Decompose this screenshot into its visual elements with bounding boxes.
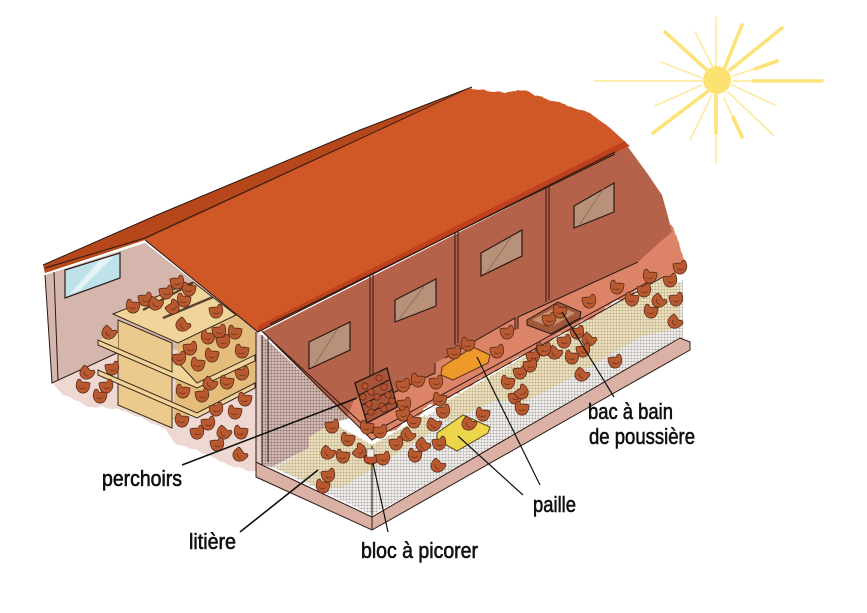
dust bath tray bbox=[527, 302, 581, 334]
hens bbox=[76, 260, 687, 493]
pecking block on floor bbox=[437, 415, 490, 451]
building base bbox=[256, 332, 690, 530]
sun bbox=[595, 17, 822, 163]
label: bac à bain de poussière: bac à bain bbox=[588, 399, 673, 424]
label: litière: litière bbox=[189, 529, 236, 554]
label: perchoirs: perchoirs bbox=[102, 466, 182, 491]
label: paille: paille bbox=[533, 492, 576, 517]
straw bale bbox=[441, 347, 490, 380]
pecking block at post bbox=[364, 449, 378, 464]
front windows bbox=[309, 183, 614, 369]
label: bac à bain de poussière: de poussière bbox=[589, 424, 695, 449]
back roof slope bbox=[43, 87, 472, 273]
front wall bbox=[262, 147, 685, 440]
label: bloc à picorer: bloc à picorer bbox=[361, 538, 478, 563]
ground shadow: left yard bbox=[52, 335, 258, 472]
leader lines bbox=[182, 312, 614, 532]
main roof bbox=[145, 88, 632, 332]
hatched end wall bbox=[256, 332, 350, 477]
perches and stacked shelves bbox=[98, 282, 257, 428]
gable wall bbox=[45, 243, 258, 383]
perch ladder bbox=[355, 368, 397, 423]
gable window bbox=[65, 253, 120, 298]
littered floor bbox=[272, 277, 683, 515]
